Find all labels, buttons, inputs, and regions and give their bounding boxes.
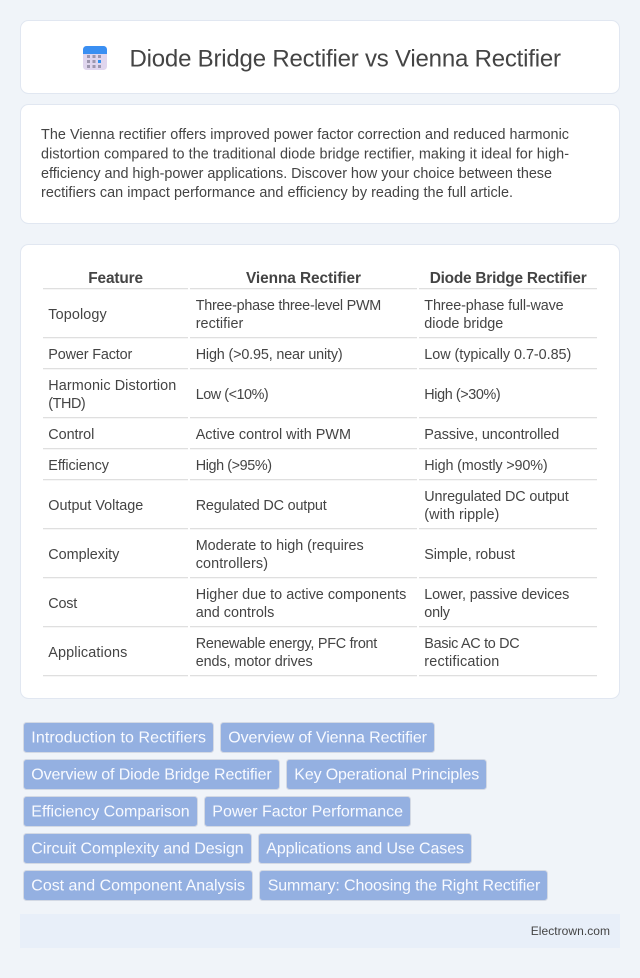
- row: topology: rectifier: [196, 316, 244, 332]
- tag: overview diode bridge: Overview of Diode Bridge Rectifier: [31, 766, 272, 784]
- row: control: Control: [48, 427, 94, 443]
- tag: power factor: Power Factor Performance: [212, 804, 403, 820]
- row: harmonic distortion: Harmonic Distortion: [48, 378, 176, 394]
- row: harmonic distortion: (THD): [48, 396, 86, 412]
- tag: efficiency: [24, 796, 198, 826]
- row: cost: and controls: [196, 605, 274, 621]
- row: efficiency: High (>95%): [196, 458, 272, 474]
- row: topology: Topology: [48, 307, 107, 323]
- table header: Vienna Rectifier: [246, 270, 361, 287]
- tag: introduction: Introduction to Rectifiers: [31, 730, 206, 746]
- row: output voltage: Unregulated DC output: [424, 489, 569, 505]
- row: harmonic distortion: [48, 378, 501, 412]
- tag: efficiency: Efficiency Comparison: [31, 804, 190, 820]
- row: control: [48, 427, 559, 443]
- row: harmonic distortion: High (>30%): [424, 387, 501, 403]
- row: output voltage: (with ripple): [424, 507, 499, 523]
- intro text: [41, 127, 569, 201]
- panel: introduction: [20, 104, 620, 224]
- row: efficiency: [48, 458, 548, 474]
- row: power factor: High (>0.95, near unity): [196, 347, 343, 363]
- tag: circuit complexity: [24, 834, 252, 864]
- tag: power factor: [204, 796, 410, 826]
- row: complexity: Simple, robust: [424, 547, 515, 563]
- row: efficiency: Efficiency: [48, 458, 110, 474]
- row: applications: [48, 636, 520, 670]
- tag: cost: [24, 870, 252, 900]
- row: power factor: [48, 347, 571, 363]
- row: applications: ends, motor drives: [196, 654, 313, 670]
- row: applications: Basic AC to DC: [424, 636, 520, 652]
- row: complexity: controllers): [196, 556, 268, 572]
- tag: introduction: [24, 722, 214, 752]
- row: cost: Lower, passive devices: [424, 587, 569, 603]
- row: applications: rectification: [424, 654, 499, 670]
- row: harmonic distortion: Low (<10%): [196, 387, 269, 403]
- intro text: efficiency and high-power applications. Discover how your choice between these: [41, 166, 552, 182]
- panel: header: [20, 20, 620, 94]
- tag: circuit complexity: Circuit Complexity and Design: [31, 840, 244, 858]
- intro text: The Vienna rectifier offers improved power factor correction and reduced harmonic: [41, 127, 569, 143]
- tag: summary: [260, 870, 548, 900]
- row: cost: [48, 587, 569, 621]
- tag: applications: Applications and Use Cases: [266, 840, 464, 858]
- row: output voltage: Output Voltage: [48, 498, 143, 514]
- icon: calendar: [83, 46, 107, 70]
- tag: operational principles: [286, 760, 486, 790]
- title: Diode Bridge Rectifier vs Vienna Rectifier: [130, 46, 561, 72]
- footer: Electrown.com: [531, 924, 610, 938]
- row: topology: [48, 298, 564, 332]
- row: complexity: Complexity: [48, 547, 120, 563]
- row: topology: diode bridge: [424, 316, 503, 332]
- row: cost: Cost: [48, 596, 77, 612]
- row: control: Passive, uncontrolled: [424, 427, 559, 443]
- row: efficiency: High (mostly >90%): [424, 458, 548, 474]
- row: power factor: Power Factor: [48, 347, 133, 363]
- row: applications: Applications: [48, 645, 127, 661]
- row: power factor: Low (typically 0.7-0.85): [424, 347, 571, 363]
- row: complexity: [48, 538, 515, 572]
- tag: summary: Summary: Choosing the Right Rectifier: [268, 878, 541, 894]
- row: applications: Renewable energy, PFC front: [196, 636, 377, 652]
- panel: topic tags: [24, 722, 548, 900]
- tag: applications: [258, 834, 472, 864]
- row: cost: Higher due to active components: [196, 587, 406, 603]
- tag: overview vienna: [220, 722, 434, 752]
- row: control: Active control with PWM: [196, 427, 351, 443]
- intro text: distortion compared to the traditional diode bridge rectifier, making it ideal for high-: [41, 146, 569, 162]
- row: complexity: Moderate to high (requires: [196, 538, 364, 554]
- row: cost: only: [424, 605, 451, 621]
- table header: Feature: [88, 270, 143, 287]
- row: output voltage: Regulated DC output: [196, 498, 327, 514]
- footer: [20, 914, 620, 948]
- row: output voltage: [48, 489, 569, 523]
- row: topology: Three-phase full-wave: [424, 298, 564, 314]
- table header: Diode Bridge Rectifier: [430, 270, 587, 287]
- intro text: rectifiers can impact performance and efficiency by reading the full article.: [41, 185, 513, 201]
- tag: operational principles: Key Operational Principles: [294, 766, 479, 784]
- panel: comparison table: [20, 244, 620, 698]
- tag: overview vienna: Overview of Vienna Rectifier: [228, 730, 428, 746]
- table header: [88, 270, 587, 287]
- tag: cost: Cost and Component Analysis: [31, 878, 245, 894]
- row: topology: Three-phase three-level PWM: [196, 298, 381, 314]
- tag: overview diode bridge: [24, 760, 280, 790]
